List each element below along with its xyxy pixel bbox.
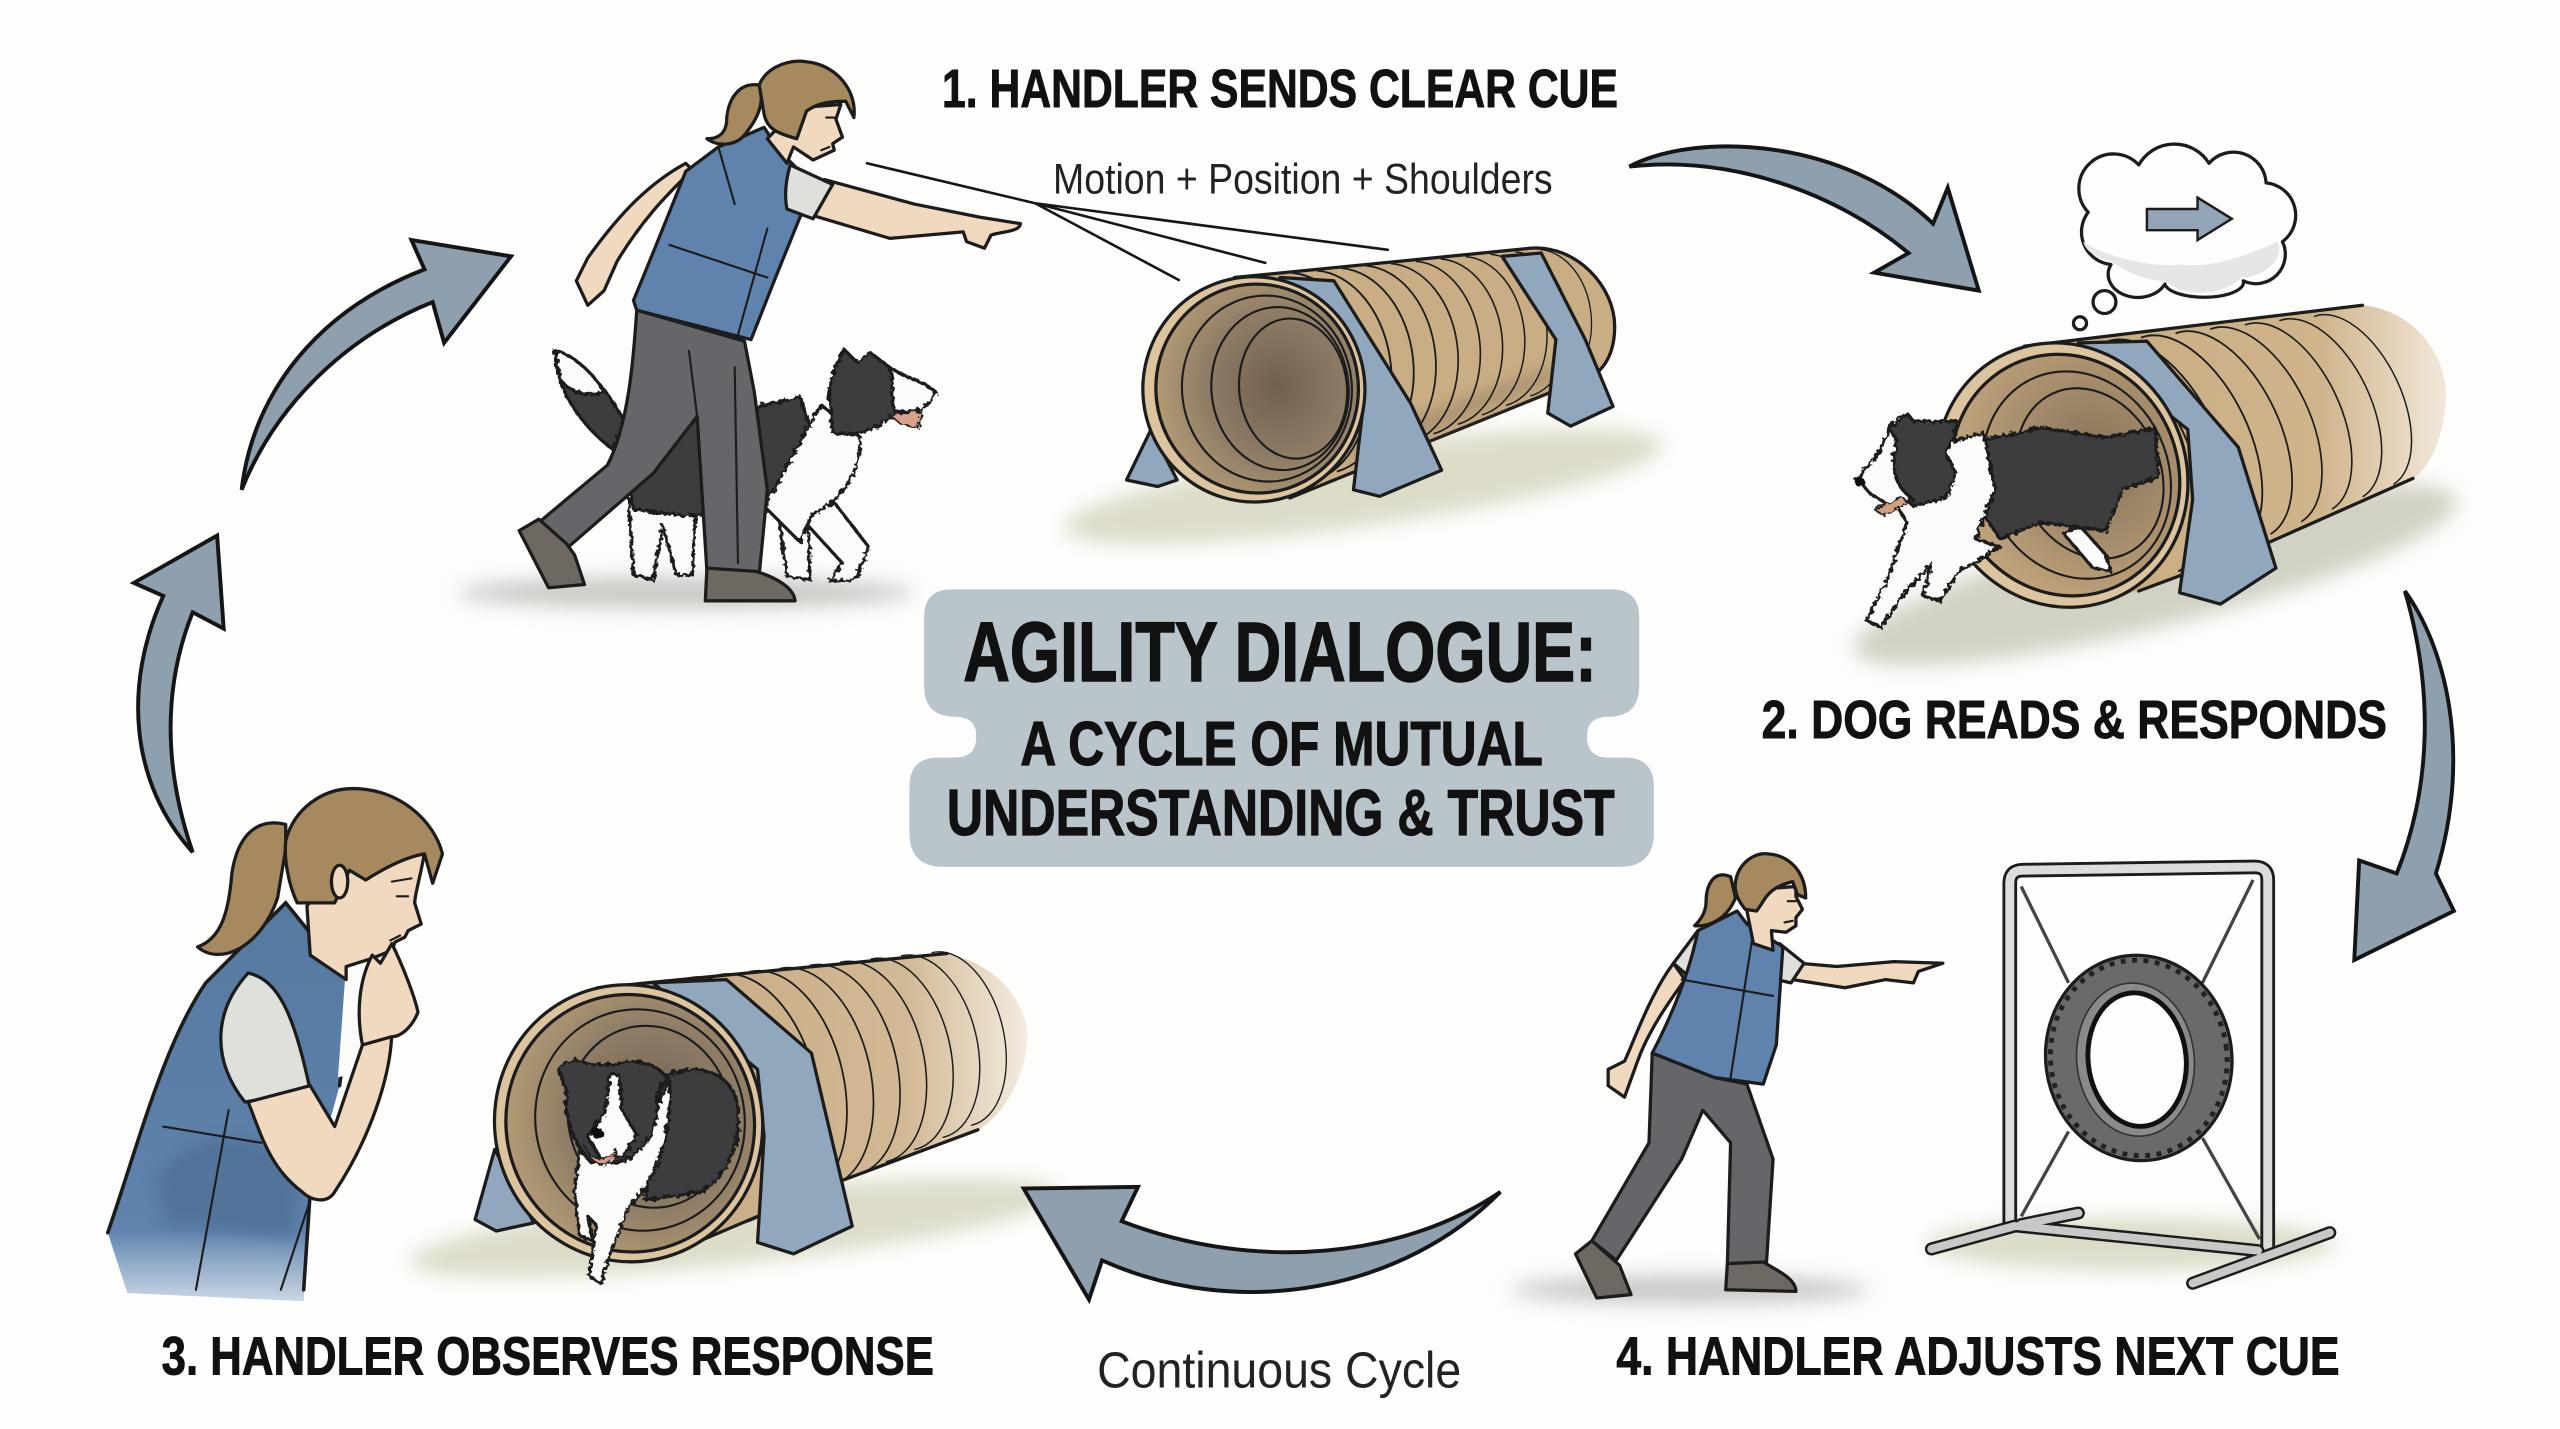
arrow: step 4 to step 3 [1024, 1187, 1500, 1300]
arrow: step 3 upward [134, 536, 224, 852]
ground patch [1059, 406, 1668, 567]
arrow: step 2 to step 4 [2354, 591, 2454, 960]
ropes [2021, 880, 2260, 1239]
step 1 heading: 1. HANDLER SENDS CLEAR CUE [942, 59, 1618, 119]
raised arm and hand [248, 1029, 392, 1200]
pointing arm [1793, 962, 1943, 988]
tunnel opening [1893, 301, 2231, 649]
title line 1: AGILITY DIALOGUE: [963, 604, 1597, 699]
step 4 heading: 4. HANDLER ADJUSTS NEXT CUE [1616, 1327, 2340, 1387]
scene: step 2 dog exiting tunnel [1841, 144, 2469, 700]
continuous cycle caption: Continuous Cycle [1097, 1342, 1461, 1399]
thought arrow [2147, 198, 2232, 240]
dog walking [555, 349, 936, 581]
ground patch [406, 1158, 1063, 1298]
tunnel body [598, 953, 1027, 1259]
tunnel opening [467, 958, 790, 1289]
step 2 heading: 2. DOG READS & RESPONDS [1762, 690, 2387, 750]
cue caption: Motion + Position + Shoulders [1053, 155, 1553, 202]
hair [285, 789, 442, 903]
sleeve [221, 973, 310, 1102]
scene: step 3 handler observing [108, 789, 442, 1301]
trousers [1592, 1053, 1773, 1265]
ground shadow [1510, 1275, 1869, 1304]
scene: step 1 handler and dog [457, 61, 1020, 609]
tunnel body [1234, 248, 1615, 498]
head [1747, 887, 1802, 950]
thought bubble [2073, 144, 2296, 330]
dog facing viewer [558, 1060, 738, 1283]
ground shadow [457, 576, 914, 609]
ground patch [1927, 1218, 2335, 1270]
ponytail [198, 823, 286, 954]
cloth weights [1502, 253, 1613, 426]
vest [1652, 911, 1783, 1084]
step 3 heading: 3. HANDLER OBSERVES RESPONSE [162, 1327, 934, 1387]
dog running [1855, 413, 2158, 627]
arrow: upward to step 1 [242, 240, 511, 490]
shirt front [338, 963, 369, 1078]
ground patch [1841, 449, 2469, 700]
scene: step 4 tire jump [1927, 867, 2335, 1283]
scene: step 3 dog in tunnel [406, 952, 1063, 1298]
title line 3: UNDERSTANDING & TRUST [947, 776, 1615, 849]
cue lines [867, 163, 1388, 280]
tunnel body [2024, 305, 2446, 596]
central title panel [909, 589, 1654, 867]
cloth weight [2078, 341, 2276, 604]
scene: step 4 handler pointing [1510, 854, 1943, 1304]
scene: step 1 tunnel [1059, 248, 1668, 567]
frame [1931, 867, 2330, 1283]
left arm [1608, 963, 1685, 1097]
boots [1576, 1241, 1631, 1298]
arrow: step 1 to step 2 [1629, 146, 1979, 291]
face and neck [307, 852, 424, 980]
cloth weights [475, 1149, 534, 1231]
title line 2: A CYCLE OF MUTUAL [1020, 710, 1543, 779]
vest [108, 903, 353, 1301]
handler pointing [519, 61, 1020, 601]
tire [2032, 943, 2245, 1173]
tunnel opening [1132, 266, 1376, 513]
